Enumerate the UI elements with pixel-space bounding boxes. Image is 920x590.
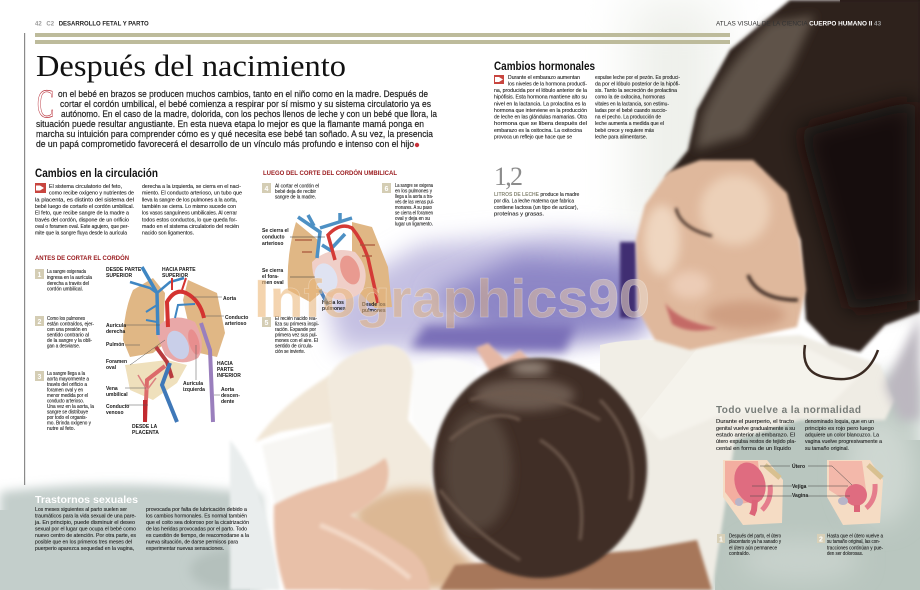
heading: Trastornos sexuales [35, 495, 138, 506]
text columns: oval o foramen oval. Este agujero, que per- [35, 224, 129, 230]
step 3: menor medida por el [47, 393, 88, 399]
diagram labels: HACIA PARTE [162, 267, 196, 273]
callout: 1,2 litros de leche [494, 162, 580, 218]
step 4: 4 [264, 186, 268, 193]
diagram labels: INFERIOR [217, 373, 241, 379]
step 2 [817, 534, 883, 557]
step 3: por todo el organis- [47, 415, 87, 421]
photo: lavender garment [325, 232, 650, 352]
intro text: cortar el cordón umbilical, el bebé comienza a respirar por sí mismo y su sistema circulatorio ya es [60, 98, 431, 109]
header right: ATLAS VISUAL DE LA CIENCIA CUERPO HUMANO II 43 [716, 20, 882, 28]
diagram labels: arterioso [225, 321, 246, 327]
step 3: nutre al feto. [47, 426, 75, 432]
text columns: bebé luego de cortarlo el cordón umbilical. [35, 204, 134, 210]
callout text: contiene lactosa (un tipo de azúcar), [494, 205, 578, 211]
text columns: traumáticos para la vida sexual de una pare- [35, 514, 136, 520]
intro text: marcha su intuición para comprender cómo es y qué necesita ese bebé tan soñado. A su vez, la presencia [36, 128, 434, 139]
step 2 [35, 316, 94, 350]
step 3 [35, 371, 94, 432]
text columns: embarazo es la oxitocina. La oxitocina [494, 128, 582, 134]
step 1: derecha a través del [47, 281, 89, 287]
eye [676, 208, 712, 236]
step 1: 1 [719, 536, 723, 544]
photo: white blanket [262, 335, 895, 590]
step 6: llega a la aorta a tra- [395, 194, 433, 200]
diagram: uterus after birth [723, 458, 783, 525]
text columns: miento. El conducto arterioso, un tubo que [142, 191, 242, 197]
watermark: Infographics90 [254, 269, 650, 329]
panel: cambios en la circulación [35, 168, 242, 237]
text columns: na el pecho. La producción de [595, 114, 661, 120]
step 4: bebé deja de recibir [275, 189, 316, 195]
diagram labels: DESDE LA [132, 424, 158, 430]
photo: white sleeve [230, 440, 280, 590]
photo: baby back [355, 488, 500, 590]
step 5: mones con el aire. El [275, 338, 318, 344]
text columns: los cambios hormonales. Es normal también [146, 514, 247, 520]
step 5: 5 [264, 320, 268, 327]
diagram labels: Aorta [221, 387, 234, 393]
diagram labels and leader lines: Útero [792, 463, 805, 470]
step 1: placentario ya ha sanado y [729, 539, 781, 545]
text columns: El feto, que recibe sangre de la madre a [35, 211, 129, 217]
diagram: newborn circulation [288, 213, 392, 308]
step 3: La sangre llega a la [47, 371, 85, 377]
text columns: cental en forma de un líquido [716, 446, 791, 452]
intro text: on el bebé en brazos se producen muchos cambios, tanto en el niño como en la madre. Después de [58, 88, 428, 99]
step 6: se cierra el foramen [395, 210, 433, 216]
intro text: autónomo. En el caso de la madre, dolorida, con los pechos llenos de leche y con un bebé que llora, la [61, 108, 438, 119]
intro text: situación puede resultar angustiante. En esta nueva etapa lo mejor es que la flamante mamá ponga en [36, 118, 424, 129]
text columns: vagina vuelve progresivamente a [805, 439, 882, 445]
step 6: monares. A su paso [395, 205, 432, 211]
page rule [24, 33, 25, 485]
diagram labels: umbilical [106, 392, 128, 398]
diagram labels: el fora- [262, 274, 279, 280]
step 6 [382, 183, 434, 228]
step 5: primera vez sus pul- [275, 332, 317, 338]
text columns: ja. En principio, puede disminuir el deseo [34, 520, 135, 526]
text columns: vitales en la lactancia, son estimu- [595, 102, 669, 108]
drop cap: C [37, 81, 54, 126]
text columns: mite que la sangre fluya desde la aurícula [35, 231, 127, 237]
step 6: lugar un ligamento. [395, 222, 433, 228]
panel: luego del corte del cordón [262, 168, 434, 355]
text columns: principio es rojo pero luego [805, 426, 874, 432]
step 6: en los pulmones y [395, 188, 432, 194]
text columns: adquiere un color blancuzco. La [805, 432, 879, 438]
diagram labels: Vena [106, 386, 118, 392]
step 5: El recién nacido rea- [275, 316, 317, 322]
step 2: sentido contrario al [47, 332, 89, 338]
text columns: hormona que interviene en la producción [494, 108, 587, 114]
step 1: 1 [38, 272, 42, 279]
heading: Todo vuelve a la normalidad [716, 405, 861, 416]
diagram labels: Se cierra [262, 268, 283, 274]
text columns [494, 75, 680, 140]
step 2: cen una presión en [47, 327, 87, 333]
diagram labels [106, 267, 248, 436]
text columns: genital vuelve gradualmente a su [716, 426, 795, 432]
diagram labels: SUPERIOR [162, 273, 189, 279]
diagram labels: Aurícula [106, 323, 126, 329]
step 2: de la sangre y la obli- [47, 338, 92, 344]
text columns: nueva situación, de darse permisos para [146, 540, 238, 546]
text columns: útero expulsa restos de tejido pla- [716, 439, 796, 445]
photo: mother's hand [274, 458, 430, 590]
step 2: 2 [819, 536, 823, 544]
diagram labels and leader lines: Vagina [792, 493, 808, 499]
step 3: foramen oval y en [47, 388, 83, 394]
text columns: de las heridas provocadas por el parto. Todo [146, 526, 247, 532]
diagram labels: Pulmón [106, 342, 124, 348]
diagram labels: PLACENTA [132, 430, 159, 436]
diagram labels: Conducto [106, 404, 129, 410]
step 6: 6 [384, 186, 388, 193]
diagram labels [262, 228, 386, 314]
diagram: uterus at original size [827, 460, 883, 525]
text columns: todos estos conductos, lo que queda for- [142, 217, 237, 223]
diagram labels: pulmones [362, 308, 386, 314]
text columns: los niveles de la hormona productí- [508, 82, 587, 88]
diagram labels: HACIA [217, 361, 233, 367]
intro text [36, 81, 438, 149]
diagram labels: PARTE [217, 367, 234, 373]
step 2: 2 [38, 319, 42, 326]
text columns: ladas por el bebé cuando succio- [595, 108, 667, 114]
text columns: su tamaño original. [805, 446, 849, 452]
diagram labels: Foramen [106, 359, 127, 365]
diagram labels: Se cierra el [262, 228, 289, 234]
text columns [35, 184, 242, 237]
text columns: derecha a la izquierda, se cierra en el naci- [142, 184, 241, 190]
step 1: Después del parto, el útero [729, 534, 781, 540]
callout text [494, 192, 580, 218]
text columns: bebé crece y requiere más [595, 128, 654, 134]
text columns: sis. Tanto la secreción de prolactina [595, 88, 677, 94]
diagram labels: conducto [262, 234, 284, 240]
end mark [415, 143, 419, 147]
step 1 [35, 269, 92, 292]
text columns: leche aumenta a medida que el [595, 121, 664, 127]
step 2: están contraídos, ejer- [47, 322, 94, 328]
eye [748, 275, 798, 300]
step 1: contraído. [729, 551, 750, 557]
callout text: LITROS DE LECHE produce la madre [494, 192, 580, 198]
diagram labels: pulmones [322, 306, 346, 312]
step 2: den ser dolorosas. [827, 551, 863, 557]
step 5: liza su primera inspi- [275, 322, 319, 328]
diagram labels: Hacia los [322, 300, 344, 306]
text columns: leche para alimentarse. [595, 134, 647, 140]
diagram labels: Desde los [362, 302, 386, 308]
text columns: posible que en los primeros tres meses del [35, 540, 132, 546]
text columns: hipófisis. Esta hormona mantiene alto su [494, 94, 587, 100]
diagram labels: arterioso [262, 241, 283, 247]
text columns: como la de oxitocina, hormonas [595, 94, 665, 100]
panel: cambios hormonales [494, 61, 680, 140]
diagram labels: SUPERIOR [106, 273, 133, 279]
text columns: de leche en las glándulas mamarias. Otra [494, 114, 587, 120]
text columns: puerperio aparezca sequedad en la vagina, [35, 546, 134, 552]
lips [665, 303, 718, 331]
photo: mother's hair [665, 0, 920, 379]
step 3: Una vez en la aorta, la [47, 404, 94, 410]
text columns: na, producida por el lóbulo anterior de la [494, 88, 587, 94]
step 3: conducto arterioso. [47, 398, 84, 404]
diagram labels: dente [221, 399, 235, 405]
text columns: sexual por el lugar que ocupa el bebé como [35, 526, 136, 532]
text columns: provocada por falta de lubricación debido a [146, 507, 247, 513]
photo background: grey lower left [0, 484, 270, 590]
diagram labels: derecha [106, 329, 125, 335]
photo: mother's face [636, 160, 806, 350]
text columns: como recibe oxígeno y nutrientes de [49, 191, 134, 197]
step 2: Como los pulmones [47, 316, 85, 322]
text columns: denominado loquia, que en un [805, 419, 874, 425]
step 1 [717, 534, 781, 557]
callout text: por día. La leche materna que fabrica [494, 198, 574, 204]
diagram labels: oval [106, 365, 117, 371]
step 6: La sangre se oxigena [395, 183, 433, 189]
step 4 [262, 183, 319, 200]
panel: todo vuelve a la normalidad [716, 405, 883, 557]
text columns: mado en el sistema circulatorio del recién [142, 224, 239, 230]
diagram labels: Aurícula [183, 381, 203, 387]
diagram labels: men oval [262, 280, 284, 286]
photo: baby hand [476, 343, 530, 375]
photo background: grey-green lower right [690, 375, 920, 590]
text columns: la placenta, es distinto del sistema del [35, 197, 134, 203]
intro text: de un papá comprometido favorecerá el desarrollo de un vínculo más profundo e intenso con el hijo [36, 138, 414, 149]
step 3: través del orificio a [47, 382, 87, 388]
step 1: el útero aún permanece [729, 546, 777, 552]
photo: baby arm [255, 375, 335, 442]
step 6: vés de las venas pul- [395, 200, 434, 206]
text columns: expulse leche por el pezón. Es produci- [595, 75, 680, 81]
text columns: estado anterior al embarazo. El [716, 432, 795, 438]
step 2: Hasta que el útero vuelve a [827, 534, 883, 540]
text columns: hormona que se libera después del [494, 121, 587, 127]
heading: Cambios en la circulación [35, 168, 158, 180]
diagram labels: DESDE PARTE [106, 267, 142, 273]
header bars [35, 33, 730, 44]
step 1: ingresa en la aurícula [47, 275, 92, 281]
text columns: nivel en la lactancia. La prolactina es la [494, 102, 586, 108]
text columns: es cuestión de tiempo, de reacomodarse a la [146, 533, 249, 539]
text columns: nacido son ligamentos. [142, 231, 194, 237]
diagram labels: izquierda [183, 387, 205, 393]
step 6: oval y deja en su [395, 216, 430, 222]
panel: antes de cortar el cordón [35, 253, 248, 436]
text columns: da por el lóbulo posterior de la hipófi- [595, 82, 680, 88]
step 4: sangre de la madre. [275, 194, 316, 200]
diagram labels: Conducto [225, 315, 248, 321]
text columns: experimentar nuevas sensaciones. [146, 546, 224, 552]
step 2: su tamaño original, las con- [827, 539, 880, 545]
text columns: Durante el embarazo aumentan [508, 75, 580, 81]
heading: Cambios hormonales [494, 61, 595, 73]
step 3: aorta mayormente a [47, 376, 89, 382]
photo: baby head with dark hair [433, 358, 647, 578]
text columns: que el coito sea doloroso por la cicatrización [146, 520, 249, 526]
step 3: 3 [38, 374, 42, 381]
diagram labels and leader lines [750, 463, 852, 499]
diagram labels and leader lines: Vejiga [792, 484, 807, 490]
text columns: los vasos sanguíneos umbilicales. Al cerrar [142, 211, 237, 217]
text columns: lleva la sangre de los pulmones a la aorta, [142, 197, 237, 203]
photo: neck and shoulder [885, 315, 920, 420]
text columns: Los meses siguientes al parto suelen ser [35, 507, 127, 513]
text columns: provoca un reflejo que hace que se [494, 134, 572, 140]
text columns: también se cierra. Lo mismo sucede con [142, 204, 236, 210]
step 1: La sangre oxigenada [47, 269, 86, 275]
step 5: ción se invierte. [275, 349, 305, 355]
diagram labels: Aorta [223, 296, 236, 302]
icon: red arrow [494, 75, 504, 84]
panel: trastornos sexuales [34, 495, 249, 552]
icon: red arrow [35, 183, 46, 193]
header left: 42 C2 DESARROLLO FETAL Y PARTO [35, 22, 149, 28]
step 5: ración. Expande por [275, 327, 316, 333]
step 5: sentido de circula- [275, 344, 313, 350]
text columns: nuevo centro de atención. Por otra parte, es [35, 533, 137, 539]
diagram labels: venoso [106, 410, 124, 416]
text columns [34, 507, 249, 552]
text columns: través del cordón, dispone de un orificio [35, 217, 129, 223]
text columns: Durante el puerperio, el tracto [716, 419, 794, 425]
step 2: gan a desviarse. [47, 344, 80, 350]
callout text: proteínas y grasas. [494, 212, 544, 218]
heading: ANTES DE CORTAR EL CORDÓN [35, 253, 129, 262]
title: Después del nacimiento [36, 48, 346, 83]
step 2: tracciones continúan y pue- [827, 546, 883, 552]
step 3: sangre se distribuye [47, 410, 88, 416]
step 5 [262, 316, 319, 355]
diagram labels: descen- [221, 393, 240, 399]
text columns: El sistema circulatorio del feto, [49, 184, 122, 190]
diagram: fetal circulation [123, 267, 225, 422]
step 4: Al cortar el cordón el [275, 184, 319, 190]
big number: 1,2 [494, 162, 523, 191]
step 1: cordón umbilical. [47, 286, 83, 292]
step 3: mo. Brinda oxígeno y [47, 420, 91, 426]
heading: LUEGO DEL CORTE DEL CORDÓN UMBILICAL [263, 168, 397, 177]
text columns [716, 419, 882, 452]
